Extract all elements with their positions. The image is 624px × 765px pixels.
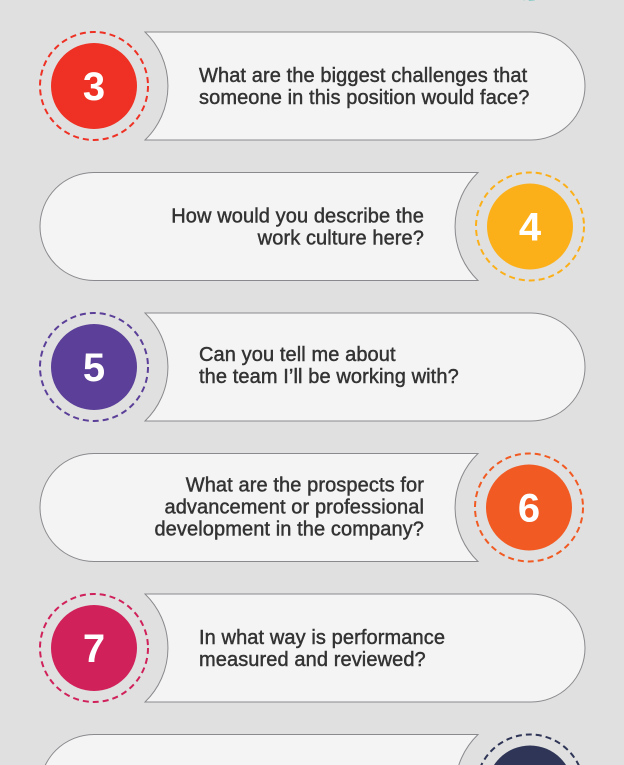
icon: number 7 circle [40,594,148,702]
text: question 6: advancement or professional [164,496,424,518]
icon: number 3 circle [40,32,148,140]
row 3 [40,32,585,140]
row 4 [40,172,584,280]
text: question 6: What are the prospects for [186,474,424,496]
row 6 [40,454,583,562]
text: question 4: work culture here? [257,228,424,250]
icon: number 5 circle [40,313,148,421]
text: question 5: the team I’ll be working with? [199,366,459,388]
icon: number 4 circle [476,172,584,280]
icon: number 3 circle: 3 [83,65,105,109]
icon: number 4 circle: 4 [519,206,542,250]
text: question 5: Can you tell me about [199,344,396,366]
row 7 [40,594,585,702]
text: question 3: someone in this position would face? [199,87,529,109]
text: question 4: How would you describe the [171,206,424,228]
text: question 7: In what way is performance [199,627,445,649]
row 8 (partial) [40,734,584,765]
icon: number 5 circle: 5 [83,346,105,390]
icon: number 6 circle [475,454,583,562]
text: question 7: measured and reviewed? [199,649,426,671]
text: question 6: development in the company? [154,518,424,540]
icon: number 7 circle: 7 [83,627,105,671]
text: question 3: What are the biggest challenges that [199,65,527,87]
row 5 [40,313,585,421]
icon: number 6 circle: 6 [518,486,540,530]
